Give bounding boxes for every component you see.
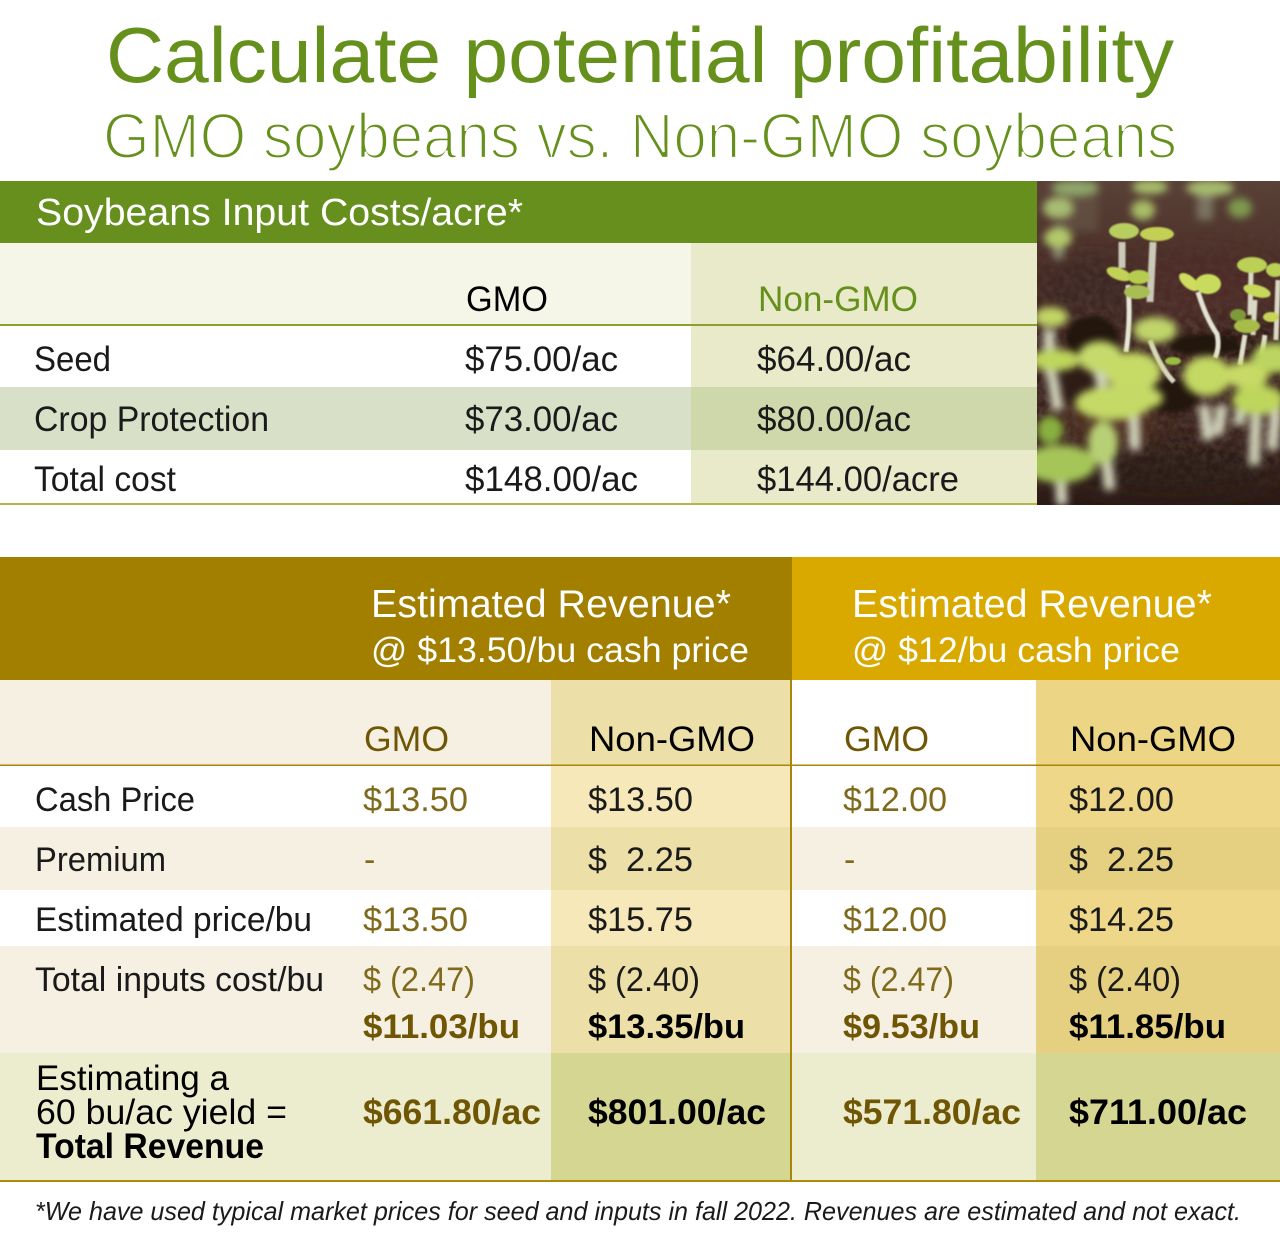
blurred foreground seedlings (1024, 307, 1280, 505)
row: total revenue: $801.00/ac (588, 1093, 766, 1132)
row: premium (35, 841, 1174, 879)
row: cash price: Cash Price (35, 781, 195, 819)
column backgrounds (0, 680, 551, 1053)
distant blurred seedlings (1043, 180, 1252, 259)
row: total cost (34, 460, 959, 499)
row: total inputs cost per bushel: $ (2.47) (843, 961, 954, 999)
row: premium: - (364, 841, 375, 879)
column headers: GMO (364, 720, 449, 759)
row: crop protection: $73.00/ac (465, 400, 618, 439)
row: total cost: Total cost (34, 460, 176, 499)
row: total inputs cost per bushel: $ (2.47) (363, 961, 475, 999)
heading: subtitle: GMO soybeans vs. Non-GMO soybeans (103, 100, 1177, 172)
row: premium: Premium (35, 841, 166, 879)
panel: estimated revenue table (0, 557, 1280, 1182)
column header: Non-GMO: Non-GMO (758, 280, 918, 319)
row: crop protection: Crop Protection (34, 400, 269, 439)
soil clods (1045, 316, 1241, 413)
row: total cost: $144.00/acre (757, 460, 959, 499)
row: total revenue: Total Revenue (36, 1127, 264, 1166)
heading: revenue at $13.50: Estimated Revenue* (371, 583, 731, 626)
row: total inputs cost per bushel (35, 961, 1226, 1046)
row: premium: $ (1069, 841, 1088, 879)
row: total inputs cost per bushel: $ (2.40) (588, 961, 700, 999)
row: total inputs cost per bushel: $9.53/bu (843, 1008, 980, 1046)
row: total revenue: 60 bu/ac yield = (36, 1093, 287, 1132)
row: crop protection (34, 400, 911, 439)
row: total inputs cost per bushel: $13.35/bu (588, 1008, 745, 1046)
row: cash price: $12.00 (843, 781, 947, 819)
footnote: *We have used typical market prices for seed and inputs in fall 2022. Revenues are estimated and not exact. (35, 1196, 1241, 1226)
row: premium: $ (588, 841, 607, 879)
panel: soybeans input costs (0, 181, 1037, 505)
row: seed: $64.00/ac (757, 340, 911, 379)
heading: revenue at $13.50 (371, 583, 749, 670)
row: cash price: $13.50 (363, 781, 468, 819)
row: cash price: $12.00 (1069, 781, 1174, 819)
row: cash price: $13.50 (588, 781, 693, 819)
column headers: Non-GMO (1070, 720, 1236, 759)
row: total inputs cost per bushel: $11.85/bu (1069, 1008, 1226, 1046)
heading: revenue at $12 (852, 583, 1212, 670)
row: total cost: $148.00/ac (465, 460, 638, 499)
row: total inputs cost per bushel: Total inputs cost/bu (35, 961, 324, 999)
row: total inputs cost per bushel: $ (2.40) (1069, 961, 1181, 999)
row: premium: 2.25 (626, 841, 693, 879)
heading: input costs: Soybeans Input Costs/acre* (36, 192, 523, 234)
row: estimated price per bushel: $12.00 (843, 901, 947, 939)
row: cash price (35, 781, 1174, 819)
row: seed: Seed (34, 340, 111, 379)
row: premium: 2.25 (1107, 841, 1174, 879)
row: total revenue: $711.00/ac (1069, 1093, 1247, 1132)
heading: revenue at $13.50: @ $13.50/bu cash price (371, 631, 749, 670)
column header: GMO: GMO (466, 280, 548, 319)
row: estimated price per bushel (35, 901, 1174, 939)
row: estimated price per bushel: $14.25 (1069, 901, 1174, 939)
row: estimated price per bushel: Estimated price/bu (35, 901, 312, 939)
row: total inputs cost per bushel: $11.03/bu (363, 1008, 520, 1046)
row: estimated price per bushel: $15.75 (588, 901, 693, 939)
heading: main title: Calculate potential profitability (106, 11, 1174, 99)
row: total revenue: $661.80/ac (363, 1093, 541, 1132)
row: total revenue: Estimating a (36, 1059, 230, 1098)
row: crop protection: $80.00/ac (757, 400, 911, 439)
title (103, 11, 1177, 172)
row: estimated price per bushel: $13.50 (363, 901, 468, 939)
heading: revenue at $12: Estimated Revenue* (852, 583, 1212, 626)
row: total revenue: $571.80/ac (843, 1093, 1021, 1132)
sharp seedlings (1105, 223, 1280, 382)
row: premium: - (844, 841, 855, 879)
column headers: GMO (844, 720, 929, 759)
row: total revenue (36, 1059, 1247, 1166)
header bands (0, 557, 792, 680)
row: seed: $75.00/ac (465, 340, 618, 379)
row: seed (34, 340, 911, 379)
soil grain (1037, 266, 1280, 481)
photo: soybean seedlings in soil (1024, 180, 1280, 505)
heading: revenue at $12: @ $12/bu cash price (852, 631, 1180, 670)
column headers: Non-GMO (589, 720, 755, 759)
column headers (364, 720, 1236, 759)
